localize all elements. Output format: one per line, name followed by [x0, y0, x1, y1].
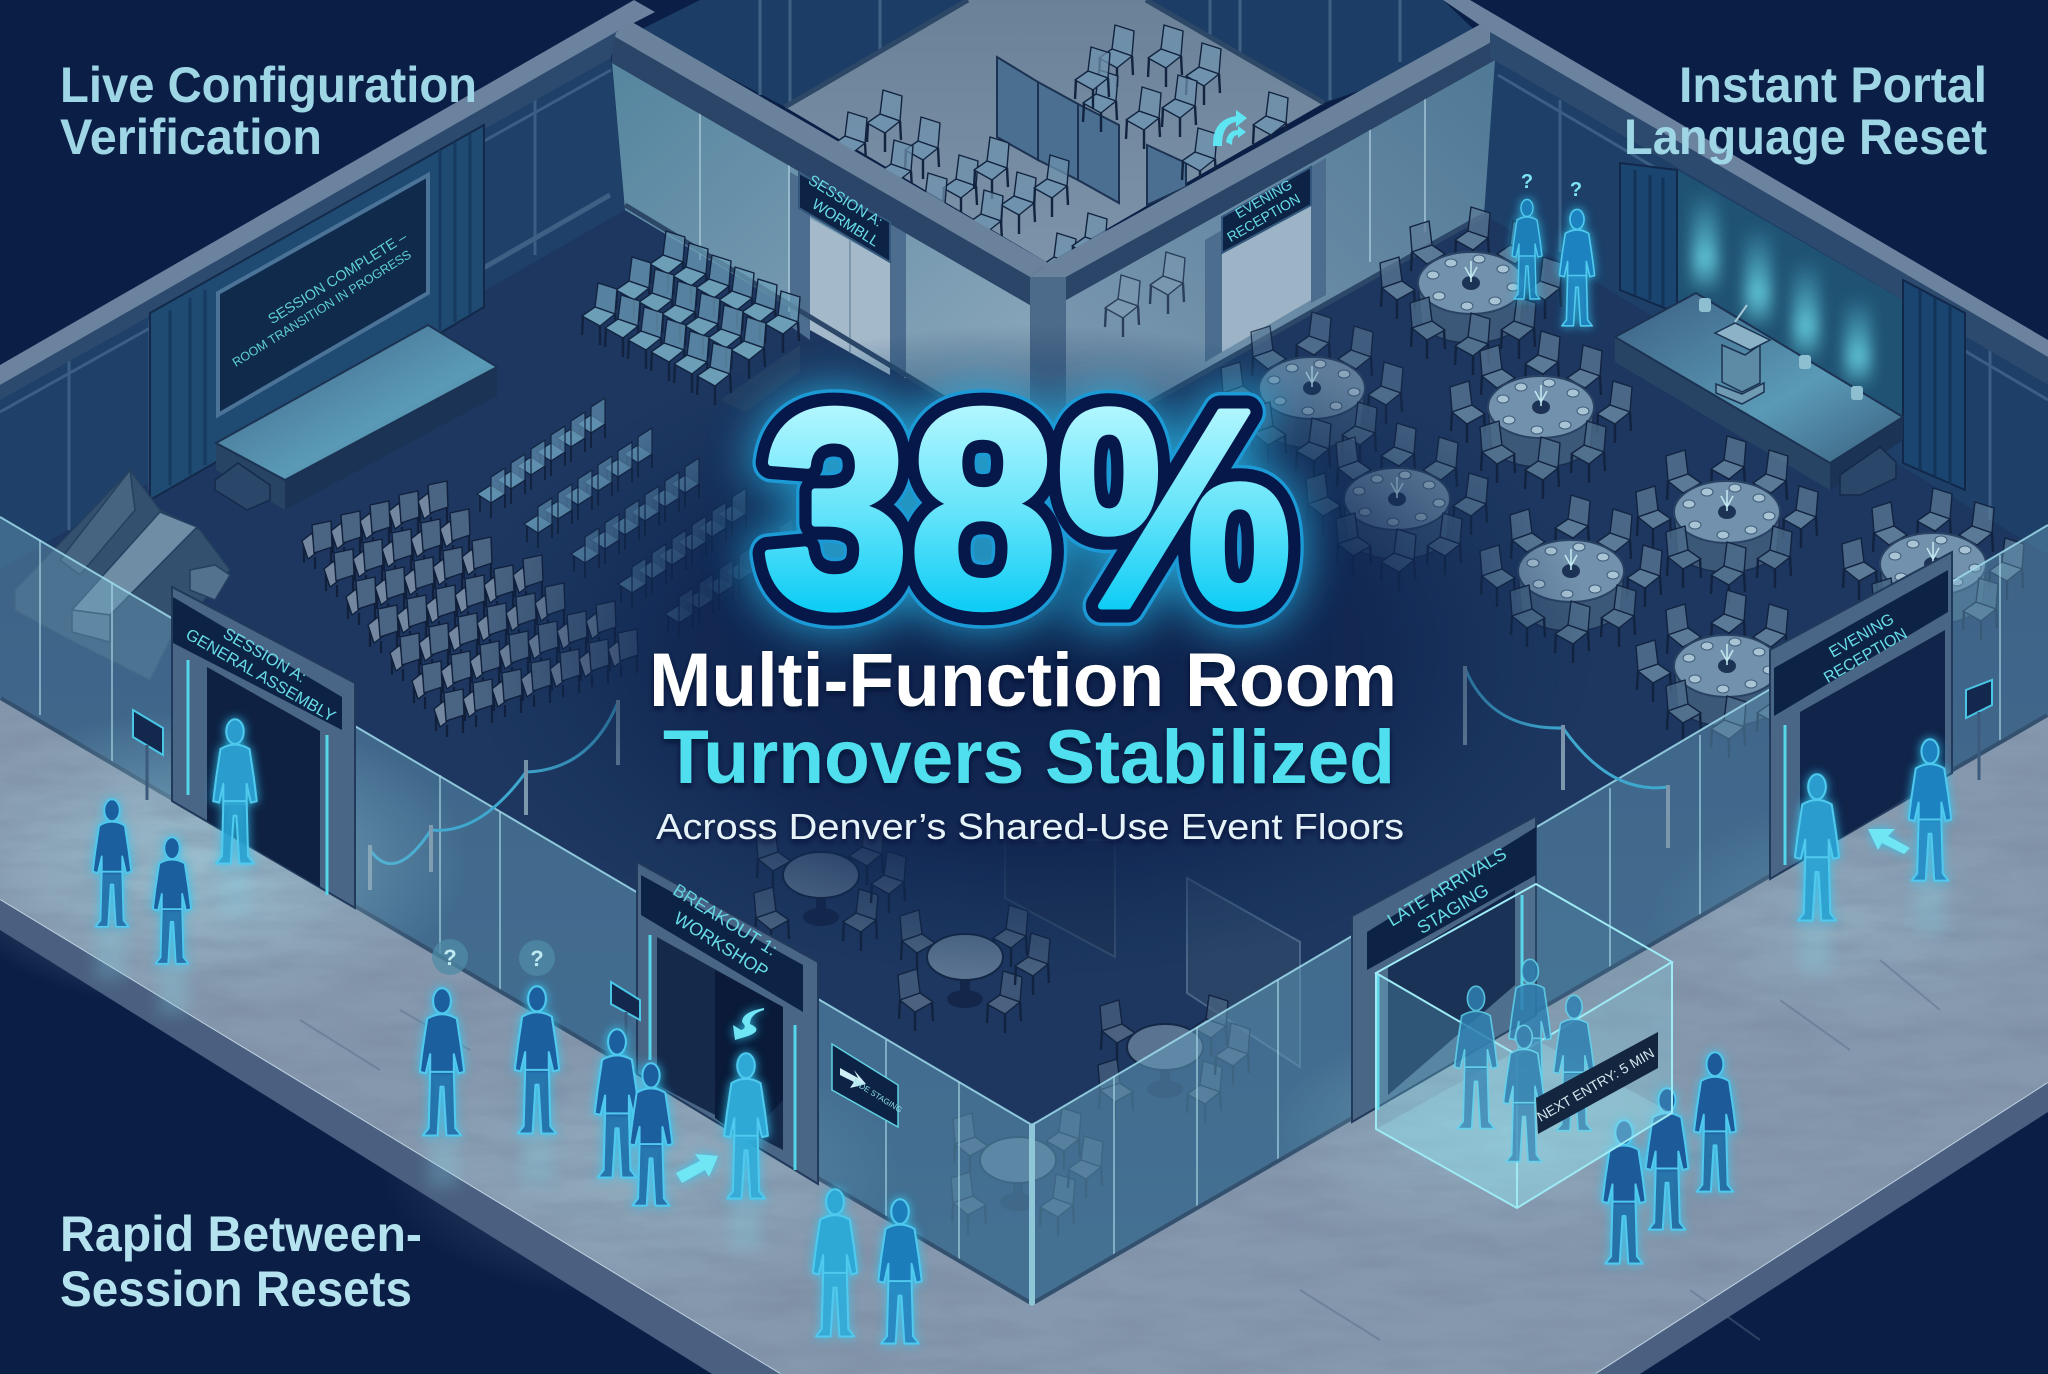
- sign: session A wormbll: WORMBLL: [809, 196, 882, 250]
- doorway: breakout workshop: [637, 862, 818, 1184]
- label: instant portal language reset: [1624, 57, 1987, 165]
- label: instant portal language reset: Language Reset: [1624, 109, 1987, 165]
- doorway: general assembly: SESSION A:: [220, 625, 309, 687]
- label: rapid between-session resets: [60, 1206, 422, 1317]
- sign: session A wormbll: SESSION A:: [805, 172, 886, 231]
- headline line 2: Turnovers Stabilized: [663, 715, 1395, 800]
- wayfinding sign: SIDE STAGING: [851, 1077, 904, 1115]
- arrow: reception entry: [1868, 829, 1910, 854]
- left stage with screen: [150, 125, 497, 510]
- wall: session A glass wall: [612, 63, 1030, 450]
- doorway: late arrivals staging: LATE ARRIVALS: [1384, 843, 1510, 930]
- label: instant portal language reset: Instant Portal: [1679, 57, 1987, 113]
- queue outside box: [1602, 1052, 1736, 1264]
- chairs in rear room: [832, 25, 1288, 295]
- wall band: left outer: [0, 0, 655, 400]
- banquet tables: [1221, 207, 2024, 758]
- doorway: late arrivals staging: [1352, 816, 1536, 1122]
- doorway: evening reception: RECEPTION: [1821, 625, 1910, 687]
- sign: evening reception rear: RECEPTION: [1224, 190, 1303, 245]
- sign: next entry: NEXT ENTRY: 5 MIN: [1534, 1045, 1657, 1125]
- number glow: 38%: [762, 351, 1292, 666]
- floor reflections under people: [95, 865, 1945, 1250]
- stage platform: [216, 443, 285, 510]
- sign: session A wormbll: [799, 172, 890, 262]
- question marks: [432, 171, 1582, 976]
- bottom pair: [813, 1189, 922, 1344]
- doorway: general assembly: [172, 587, 355, 908]
- label: rapid between-session resets: Rapid Between-: [60, 1206, 422, 1262]
- wall band: rear left beam: [612, 22, 1048, 305]
- lobby floor: [0, 700, 2048, 1374]
- sign: evening reception rear: EVENING: [1232, 176, 1295, 221]
- guidance arrows: [676, 829, 1910, 1183]
- rear question group: [1512, 200, 1595, 326]
- right stage: [1615, 163, 1965, 495]
- label: live configuration verification: [60, 57, 477, 165]
- pedestal signs: [133, 680, 1992, 1050]
- screen: [218, 175, 428, 415]
- lower room dark furniture: [754, 823, 1300, 1236]
- stanchions and ropes: [370, 666, 1668, 890]
- outer outline: 38%: [762, 351, 1292, 666]
- wall band: right outer: [1443, 0, 2048, 385]
- glass wall: lobby right: [1032, 525, 2048, 1306]
- wall band: rear right beam: [1030, 20, 1495, 300]
- question marks: ?: [1570, 179, 1582, 201]
- tables: [754, 823, 906, 951]
- seating block: rear risers: [582, 231, 800, 412]
- people inside box: [1455, 959, 1594, 1162]
- label: rapid between-session resets: Session Resets: [60, 1261, 412, 1317]
- question marks: ?: [1521, 171, 1533, 193]
- wall: left outer wall: [0, 55, 625, 569]
- doorway: evening reception: EVENING: [1826, 611, 1897, 661]
- corner pillar: [1030, 265, 1066, 450]
- number fill: 38%: [762, 351, 1292, 666]
- people: glowing attendees and staff: [93, 200, 1951, 1344]
- wall: evening reception glass wall: [1066, 60, 1495, 450]
- doorway: breakout workshop: WORKSHOP: [671, 908, 772, 982]
- stacked risers: [15, 470, 230, 680]
- label: live configuration verification: Live Configuration: [60, 57, 477, 113]
- screen text: ROOM TRANSITION IN PROGRESS: [230, 248, 414, 370]
- inner outline: 38%: [762, 351, 1292, 666]
- stage lights: [1699, 298, 1863, 400]
- floor slab side faces: [0, 900, 2048, 1374]
- doorway: general assembly: GENERAL ASSEMBLY: [183, 625, 338, 726]
- doorway: breakout workshop: BREAKOUT 1:: [670, 880, 781, 960]
- corner post: [1029, 1122, 1035, 1308]
- arrow: rear room turn: [1213, 110, 1247, 146]
- question marks: ?: [443, 945, 457, 970]
- label: live configuration verification: Verification: [60, 109, 322, 165]
- marble texture: [24, 767, 2043, 1293]
- workshop group: [420, 986, 768, 1206]
- curtains: [150, 125, 484, 500]
- general assembly group: [93, 719, 257, 964]
- partitions: [1005, 840, 1115, 957]
- question marks: ?: [530, 946, 544, 971]
- late arrivals glass box: [1376, 884, 1672, 1208]
- sign: evening reception rear: [1222, 167, 1311, 253]
- arrow: workshop door curve: [733, 1008, 764, 1040]
- doorway: evening reception: [1770, 552, 1952, 879]
- screen text: SESSION COMPLETE –: [266, 229, 411, 328]
- reception pair: [1795, 739, 1951, 921]
- headline line 1: Multi-Function Room: [649, 638, 1397, 723]
- headline number: 38%: [762, 351, 1292, 666]
- wall: right outer wall: [1484, 58, 2048, 555]
- seating block: dark: [302, 481, 638, 737]
- doorway: late arrivals staging: STAGING: [1414, 880, 1492, 938]
- wayfinding sign: [832, 1044, 904, 1127]
- central dark vignette: [470, 325, 1590, 975]
- curtains: [1620, 163, 1677, 313]
- partition screens: [997, 57, 1186, 205]
- glass wall: lobby left: [0, 517, 1032, 1306]
- steps: [1840, 447, 1896, 495]
- arrow: workshop entry: [676, 1154, 718, 1183]
- subheading: Across Denver’s Shared-Use Event Floors: [656, 806, 1404, 847]
- podium: [1715, 305, 1770, 404]
- platform: [1615, 337, 1830, 490]
- light beams: [1692, 190, 1871, 385]
- stage steps: [215, 463, 270, 510]
- seating block: side rows: [477, 398, 793, 638]
- room: rear breakout room: [640, 0, 1490, 295]
